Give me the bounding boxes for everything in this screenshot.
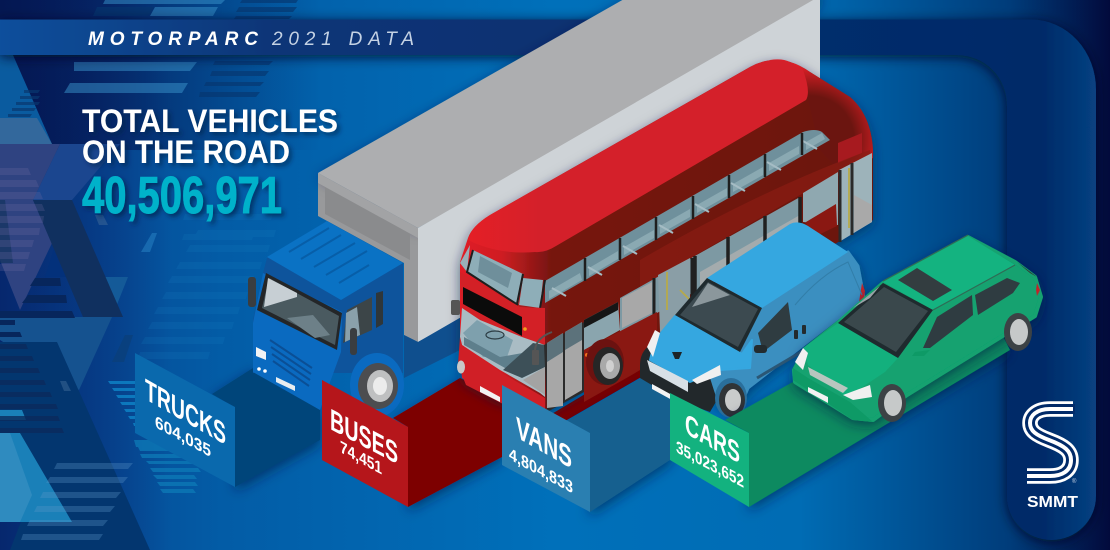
block: buses — [322, 360, 650, 507]
bus lower windows — [620, 197, 800, 334]
block: trucks — [135, 353, 320, 487]
van windscreen — [675, 278, 762, 352]
bus rear cap — [770, 59, 873, 172]
bus mirrors — [451, 300, 552, 365]
bus side windows — [584, 302, 620, 350]
bus roof — [468, 60, 808, 252]
bus upper windows — [545, 130, 830, 303]
truck windscreen — [257, 273, 342, 350]
car sunroof — [898, 268, 952, 301]
block: buses: BUSES — [330, 402, 398, 471]
background geometric pattern — [0, 0, 298, 550]
truck side windows — [343, 297, 372, 343]
truck wheel — [350, 353, 404, 417]
block: cars: 35,023,652 — [676, 437, 744, 492]
bus rear platform — [803, 172, 838, 225]
block: trucks: TRUCKS — [145, 372, 226, 452]
block: vans — [502, 377, 690, 512]
vehicle: truck — [248, 0, 820, 417]
vehicle: van — [640, 222, 865, 418]
bus body — [460, 60, 873, 411]
van wheel — [715, 378, 747, 418]
block: cars — [670, 330, 1010, 507]
truck grille — [270, 340, 312, 386]
car windscreen — [838, 283, 933, 358]
heading: total vehicles: TOTAL VEHICLES — [82, 103, 338, 139]
van bumper — [640, 345, 717, 412]
car body — [794, 237, 1041, 420]
header title: 2021 DATA — [271, 29, 414, 50]
bus mid swoosh — [640, 150, 870, 287]
car wheels — [878, 313, 1032, 422]
heading: total vehicles — [82, 103, 338, 225]
bus front panel — [460, 272, 545, 345]
truck box front — [318, 173, 418, 342]
logo wordmark: SMMT — [1027, 494, 1078, 511]
bus lower windscreen — [460, 308, 545, 397]
vehicle: car — [793, 235, 1041, 422]
block: cars: CARS — [685, 407, 740, 470]
car hood — [803, 323, 898, 395]
bus rear vent — [838, 133, 862, 163]
bus upper front windscreen — [460, 245, 545, 308]
block: vans: VANS — [516, 410, 572, 475]
block: buses: 74,451 — [340, 437, 382, 478]
car headlights and grille — [795, 348, 808, 370]
truck box side — [418, 0, 820, 342]
van body side — [710, 252, 864, 405]
block: vans: 4,804,833 — [509, 444, 573, 497]
car roof — [883, 236, 1015, 310]
registered mark: ® — [1072, 478, 1077, 485]
truck cab roof — [267, 221, 403, 300]
bus wheel — [586, 339, 624, 385]
heading: total vehicles: ON THE ROAD — [82, 134, 290, 170]
bus lower body — [584, 312, 657, 402]
block: trucks: 604,035 — [155, 412, 211, 461]
header title: MOTORPARC — [88, 29, 258, 50]
truck mirrors — [248, 277, 256, 307]
vehicle: bus — [451, 59, 873, 412]
bus front lower panel — [458, 337, 545, 412]
van hood — [650, 316, 752, 382]
van roof — [707, 222, 848, 308]
van headlights — [647, 330, 660, 357]
logo: SMMT — [1025, 409, 1078, 511]
car side windows — [923, 295, 973, 348]
header title — [88, 29, 414, 50]
logo mark — [1025, 409, 1075, 476]
van side window — [758, 302, 792, 352]
heading: total vehicles: 40,506,971 — [82, 167, 282, 225]
bus doors — [544, 322, 584, 412]
